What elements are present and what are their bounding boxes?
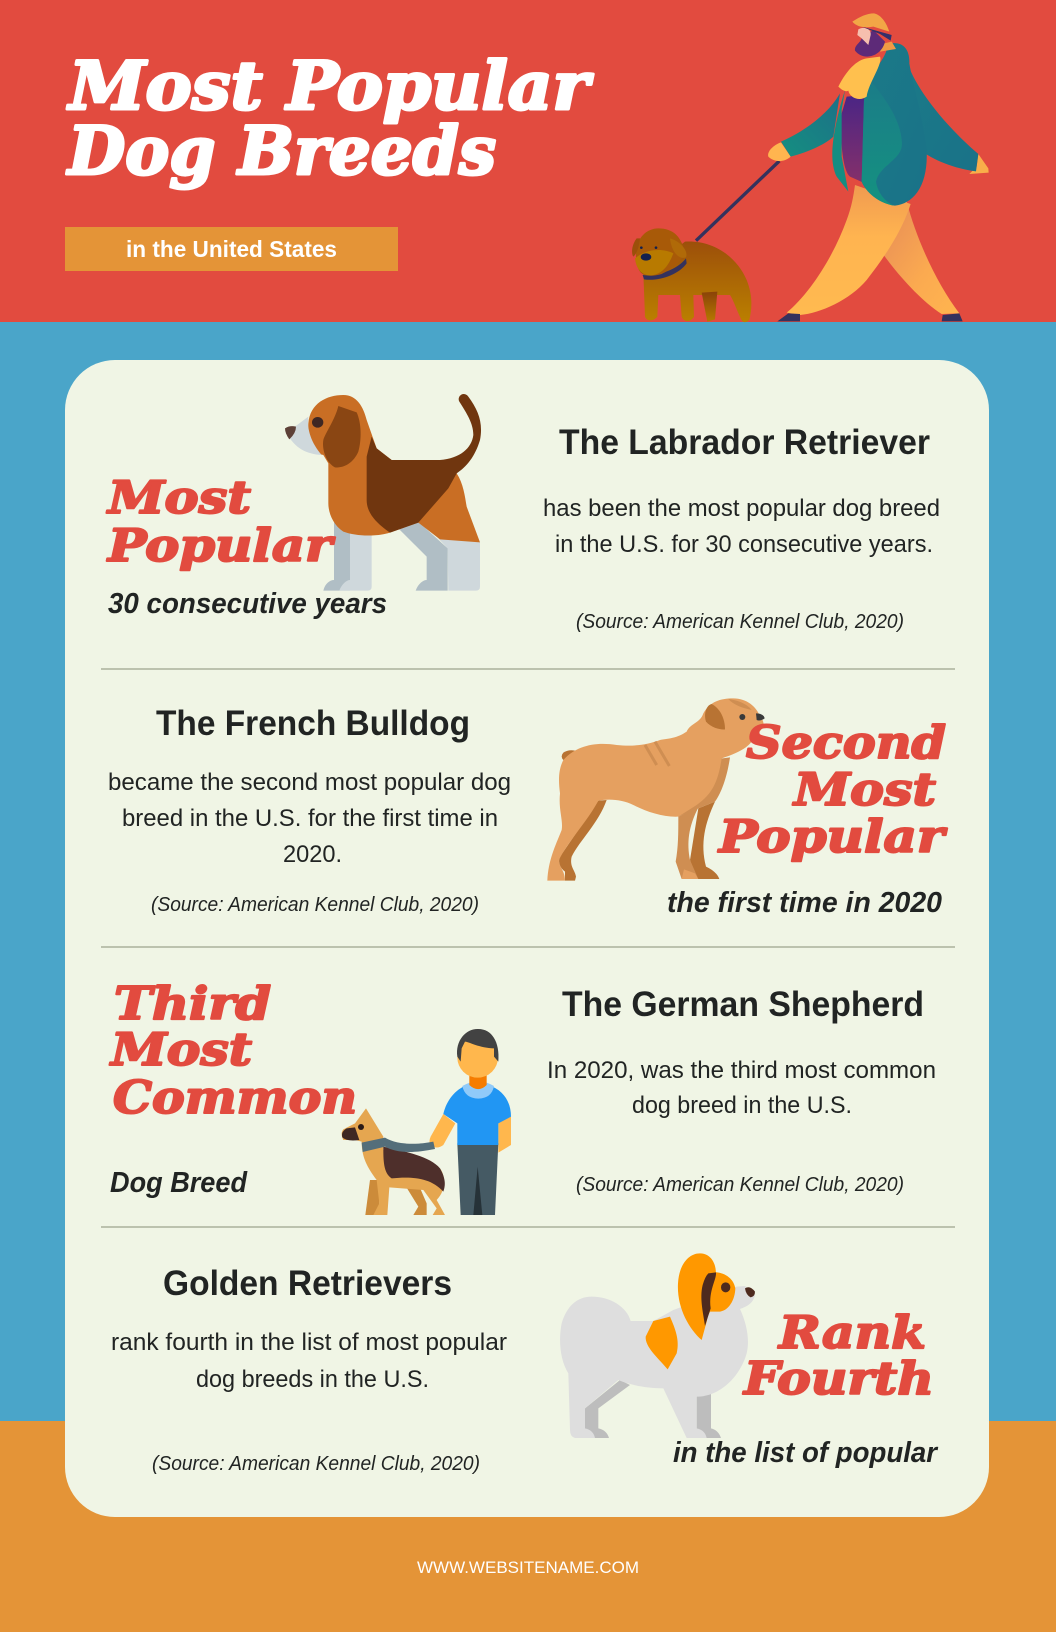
footer website: WWW.WEBSITENAME.COM [417,1558,639,1577]
heading: The German Shepherd [562,985,924,1024]
body text: In 2020, was the third most common [547,1057,936,1084]
subtitle badge [65,227,398,271]
big label: Third Most Common: Common [113,1071,357,1124]
blue background band [0,322,1056,1422]
jacket body [862,43,927,206]
heading: Golden Retrievers [163,1264,452,1303]
body text: dog breeds in the U.S. [196,1366,429,1393]
header background [0,0,1056,323]
title: Most Popular [67,47,593,125]
leash [696,161,779,241]
source: (Source: American Kennel Club, 2020) [152,1453,480,1475]
back arm and hand [969,154,989,174]
body text: dog breed in the U.S. [632,1092,852,1119]
big label: Third Most Common: Third [114,977,271,1030]
big label: Most Popular [106,471,336,572]
title [66,47,593,190]
purple shirt [841,95,867,183]
body text: has been the most popular dog breed [543,495,940,522]
body text: rank fourth in the list of most popular [111,1329,507,1356]
big label: Rank Fourth [742,1306,934,1405]
panel: French Bulldog [108,698,948,919]
title: Dog Breeds [66,112,496,190]
body text [108,769,511,868]
big label: Second Most Popular: Popular [717,810,948,863]
dog body [342,1108,445,1215]
dog middle leg [702,292,717,322]
big label: Third Most Common [109,977,357,1124]
front arm [429,1114,455,1147]
body text [547,1057,936,1119]
icon: golden dog [560,1253,755,1438]
dog head [636,228,685,276]
shoes [777,313,963,321]
dog nose [641,253,651,261]
neck [880,42,896,52]
source: (Source: American Kennel Club, 2020) [576,1174,904,1196]
orange footer band [0,1421,1056,1632]
caption: in the list of popular [673,1437,939,1469]
big label: Second Most Popular: Most [792,763,936,816]
body text: became the second most popular dog [108,769,511,796]
dog muzzle [342,1127,359,1140]
panel: German Shepherd [109,977,936,1215]
man's front leg [787,185,911,315]
big label: Second Most Popular [717,716,948,863]
trousers [457,1143,498,1215]
panel: Golden Retrievers [111,1253,939,1475]
icon: beagle-style dog [285,394,481,591]
content card [65,360,989,1517]
hat [852,13,889,32]
body text: breed in the U.S. for the first time in [122,805,498,832]
big label: Third Most Common: Most [109,1023,252,1076]
big label: Second Most Popular: Second [746,716,946,769]
big label: Most Popular: Most [106,471,251,524]
body text [111,1329,507,1393]
dog saddle [383,1147,445,1192]
caption: Dog Breed [110,1167,248,1199]
heading: The Labrador Retriever [559,423,930,462]
caption: 30 consecutive years [108,588,387,620]
front arm and hand [768,142,791,161]
source: (Source: American Kennel Club, 2020) [576,611,904,633]
dog hind shadow leg [405,1184,427,1215]
heading: The French Bulldog [156,704,470,743]
body text [543,495,940,558]
dog ears [632,238,640,257]
icon: man with German Shepherd [342,1029,511,1215]
big label: Most Popular: Popular [106,519,336,572]
jacket flap [832,90,848,192]
scarf [838,57,880,99]
subtitle badge: in the United States [126,236,337,262]
illustration: man walking dog [632,13,989,322]
source: (Source: American Kennel Club, 2020) [151,894,479,916]
dog collar [643,258,687,280]
face [857,28,871,45]
dog body [643,242,751,322]
big label: Rank Fourth: Rank [777,1306,926,1359]
body text: in the U.S. for 30 consecutive years. [555,531,933,558]
man's back arm [498,1117,511,1153]
panel: Labrador Retriever [106,394,940,633]
body text: 2020. [283,841,342,868]
beard [855,30,885,57]
big label: Rank Fourth: Fourth [742,1352,934,1405]
hat band [862,27,892,41]
caption: the first time in 2020 [667,887,942,919]
man's back leg [880,202,959,314]
icon: bulldog [547,698,765,881]
leash [362,1138,435,1152]
shirt [443,1085,511,1145]
